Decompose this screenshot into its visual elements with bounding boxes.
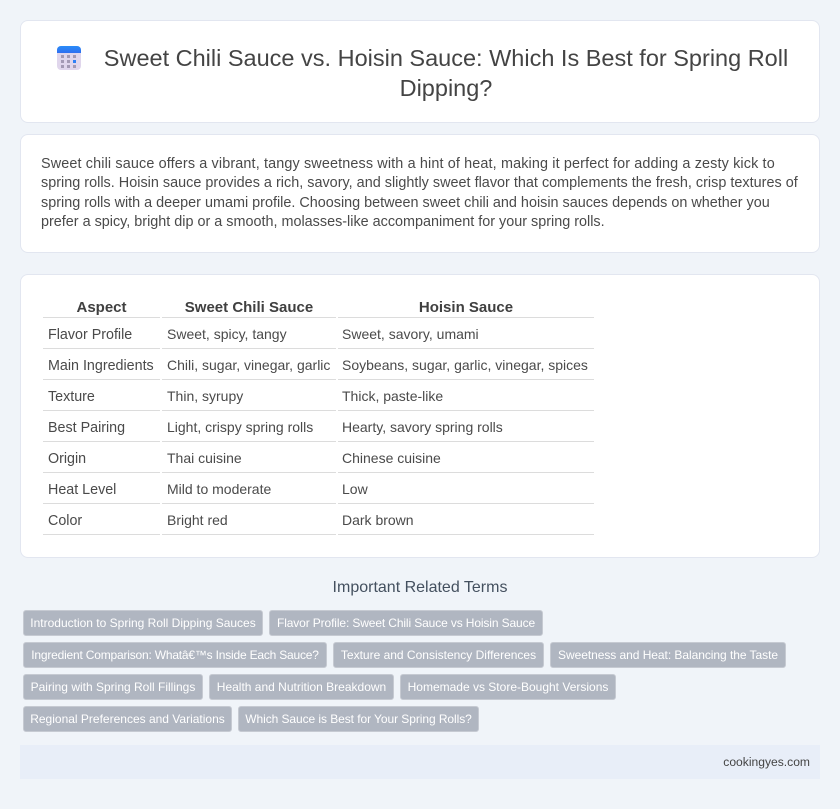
table: comparison: Sweet, spicy, tangy — [167, 326, 287, 342]
text block: introduction — [41, 156, 798, 230]
table: comparison: Main Ingredients — [48, 358, 154, 374]
tags: related terms — [23, 610, 786, 732]
tags: related terms: Flavor Profile: Sweet Chili Sauce vs Hoisin Sauce — [277, 616, 535, 630]
table: comparison: Aspect — [76, 299, 127, 316]
table: comparison: Texture — [48, 389, 95, 405]
table: comparison: Chinese cuisine — [342, 450, 441, 466]
tags: related terms: Introduction to Spring Roll Dipping Sauces — [30, 616, 256, 630]
text block: introduction: prefer a spicy, bright dip or a smooth, molasses-like accompaniment for your spring rolls. — [41, 214, 605, 230]
table: comparison: Chili, sugar, vinegar, garlic — [167, 357, 330, 373]
table: comparison: Best Pairing — [48, 420, 125, 436]
panel: header — [20, 20, 820, 123]
table: comparison: Sweet Chili Sauce — [185, 299, 313, 316]
tags: related terms: Pairing with Spring Roll Fillings — [31, 680, 195, 694]
table: comparison: Origin — [48, 451, 86, 467]
table: comparison: Soybeans, sugar, garlic, vinegar, spices — [342, 357, 588, 373]
tags: related terms: Texture and Consistency Differences — [341, 648, 536, 662]
table: comparison: Sweet, savory, umami — [342, 326, 479, 342]
panel: introduction — [20, 134, 820, 253]
table: comparison: Light, crispy spring rolls — [167, 419, 313, 435]
table: comparison: Thin, syrupy — [167, 388, 243, 404]
table: comparison: Mild to moderate — [167, 481, 271, 497]
panel: comparison table — [20, 274, 820, 558]
title: Sweet Chili Sauce vs. Hoisin Sauce: Which Is Best for Spring Roll — [104, 45, 788, 71]
table: comparison: Hoisin Sauce — [419, 299, 513, 316]
icon: calendar — [57, 46, 81, 70]
table: comparison: Dark brown — [342, 512, 414, 528]
title: Dipping? — [400, 75, 492, 101]
tags: related terms: Which Sauce is Best for Your Spring Rolls? — [245, 712, 472, 726]
text block: introduction: Sweet chili sauce offers a vibrant, tangy sweetness with a hint of heat, making it perfect for adding a zesty kick to — [41, 156, 775, 172]
tags: related terms: Health and Nutrition Breakdown — [217, 680, 386, 694]
footer credit: cookingyes.com — [723, 755, 810, 769]
table: comparison: Low — [342, 481, 368, 497]
title — [104, 45, 788, 101]
footer — [20, 745, 820, 779]
tags: related terms: Regional Preferences and Variations — [30, 712, 225, 726]
heading: related terms: Important Related Terms — [333, 579, 507, 596]
table: comparison: Heat Level — [48, 482, 116, 498]
table: comparison: Thick, paste-like — [342, 388, 443, 404]
table: comparison: Flavor Profile — [48, 327, 132, 343]
text block: introduction: spring rolls. Hoisin sauce provides a rich, savory, and slightly sweet flavor that complements the fresh, crisp textures of — [41, 175, 798, 191]
tags: related terms: Homemade vs Store-Bought Versions — [408, 680, 608, 694]
tags: related terms: Sweetness and Heat: Balancing the Taste — [558, 648, 778, 662]
text block: introduction: spring rolls with a deeper umami profile. Choosing between sweet chili and hoisin sauces depends on whether you — [41, 195, 770, 211]
table: comparison: Bright red — [167, 512, 228, 528]
table: comparison: Hearty, savory spring rolls — [342, 419, 503, 435]
table: comparison: Color — [48, 513, 82, 529]
table: comparison: Thai cuisine — [167, 450, 242, 466]
tags: related terms: Ingredient Comparison: Whatâ€™s Inside Each Sauce? — [31, 648, 319, 662]
